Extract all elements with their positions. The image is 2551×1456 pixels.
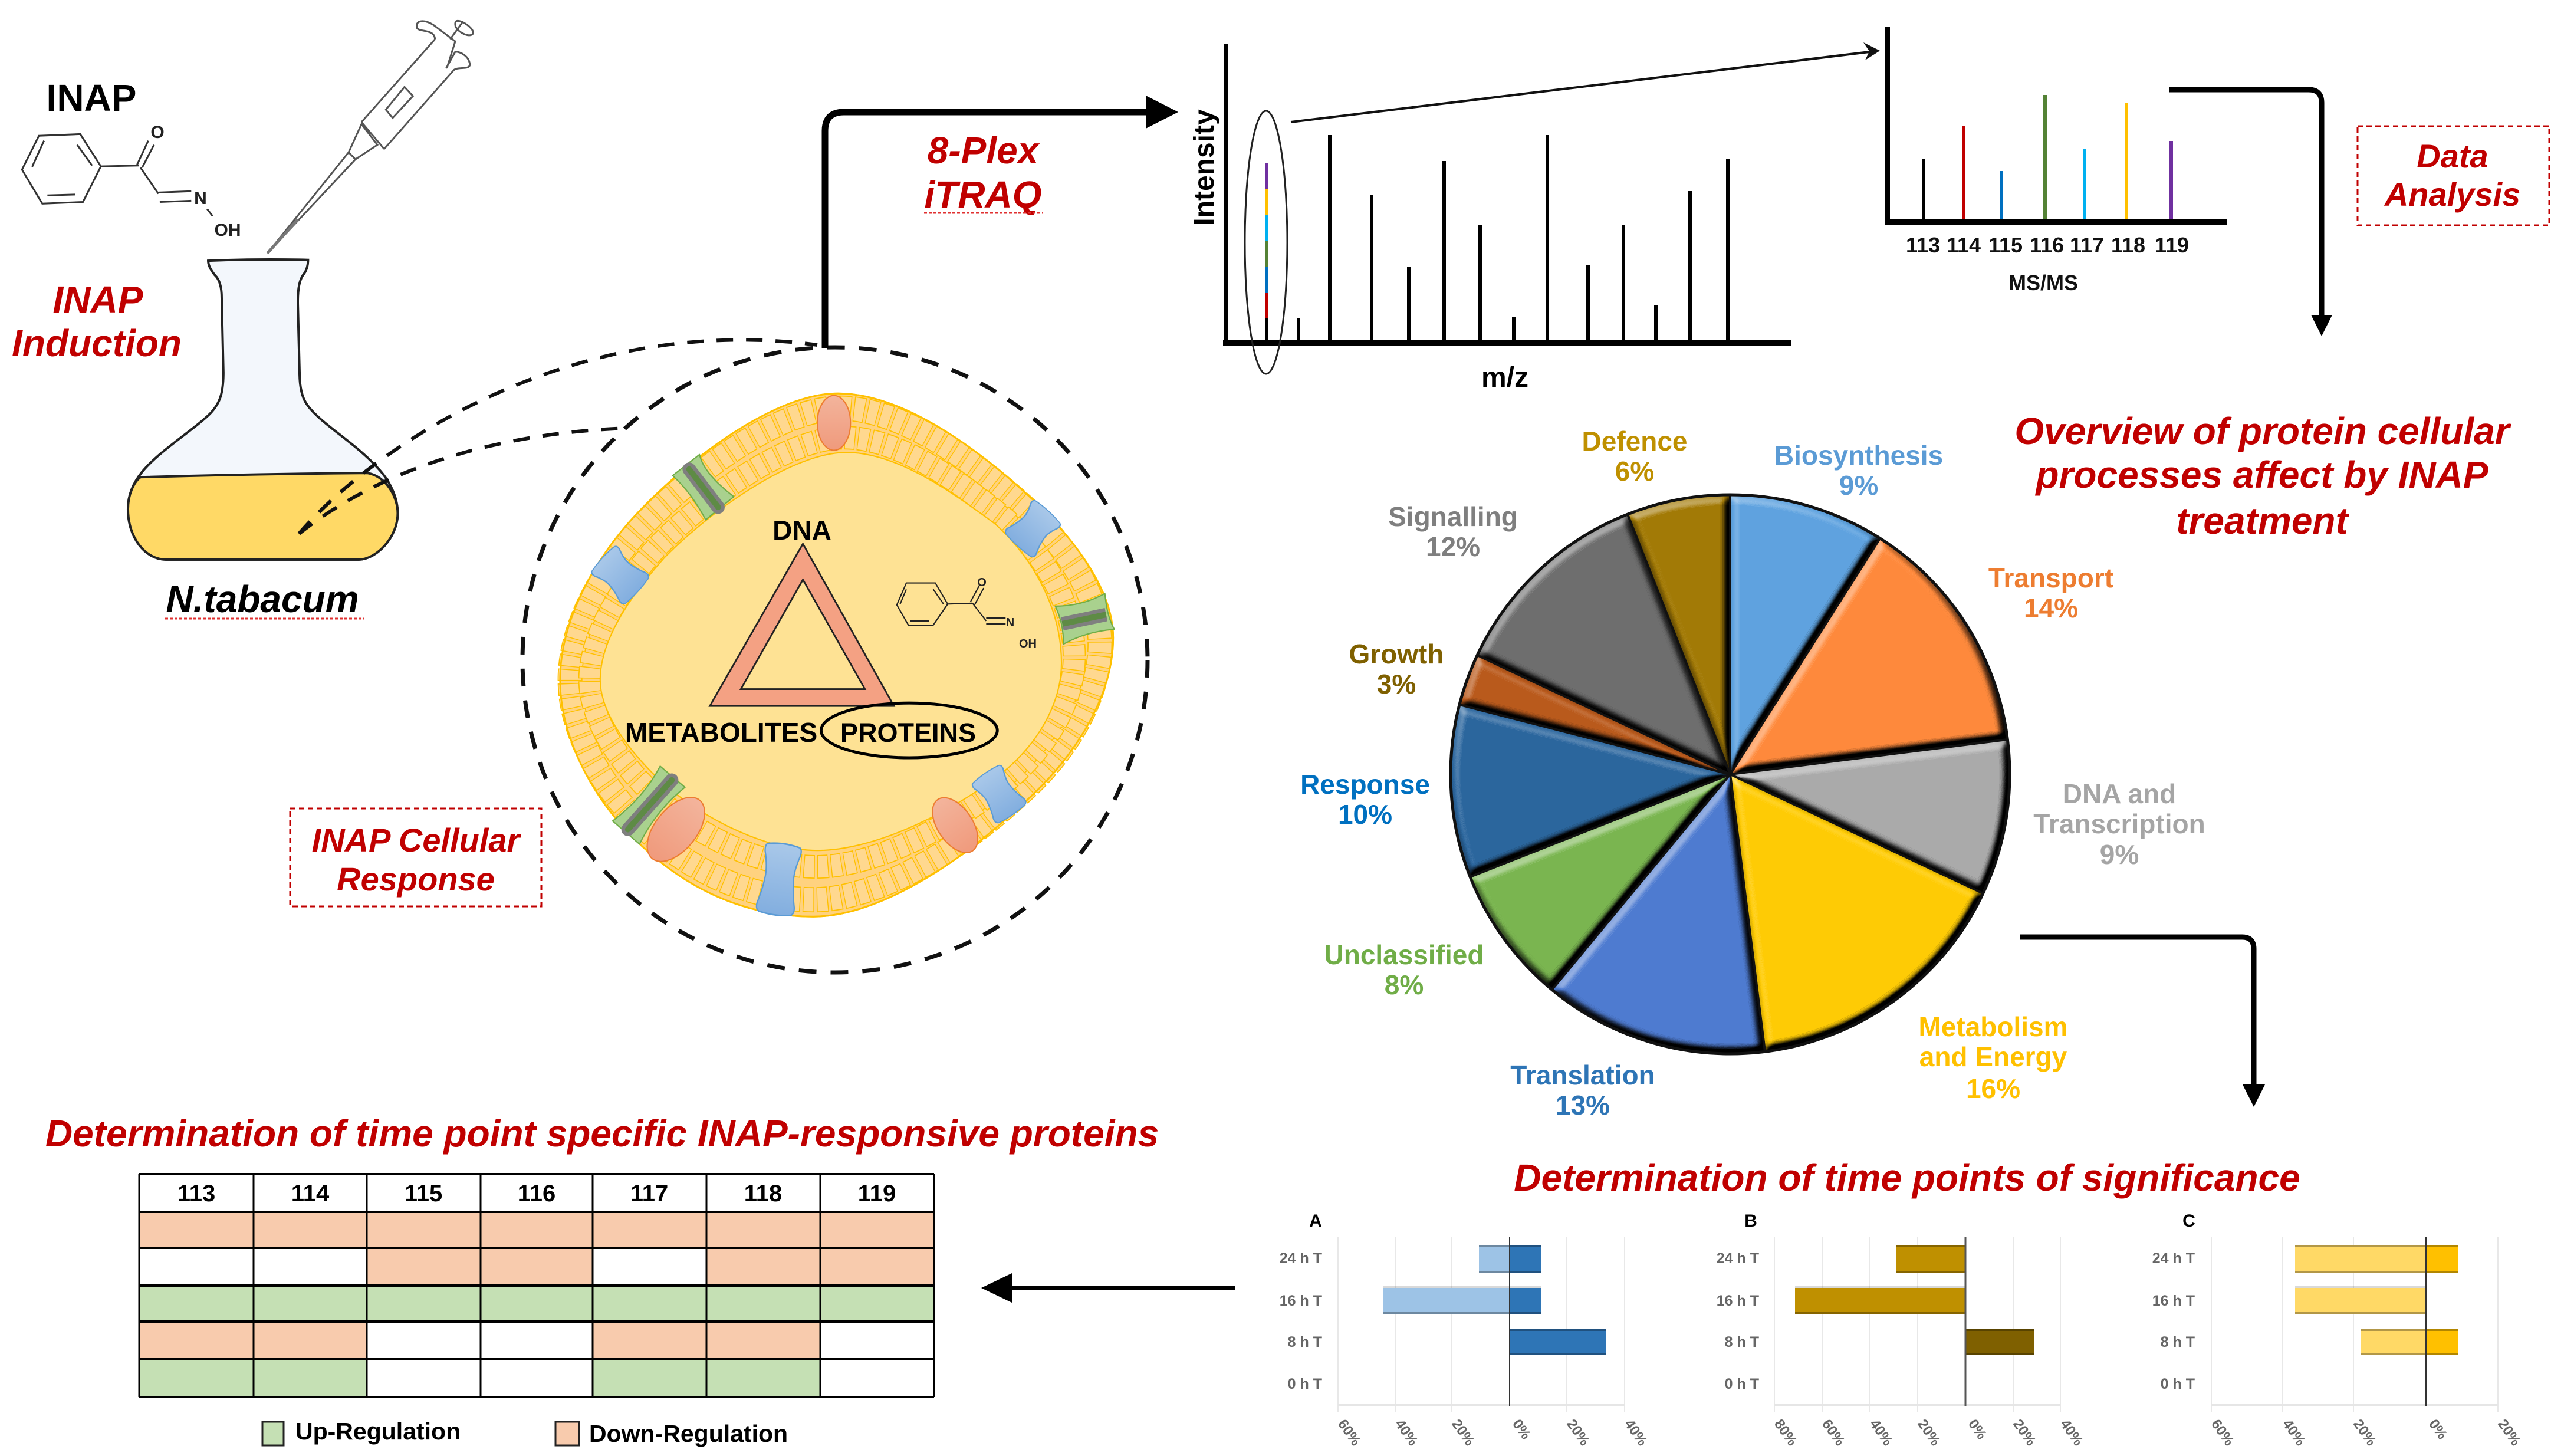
chart B: 0 h T xyxy=(1725,1376,1759,1392)
chart: MS/MS reporter ions: 115 xyxy=(1988,233,2023,257)
chart C: 24 h T xyxy=(2152,1250,2195,1267)
chart C: 0 h T xyxy=(2161,1376,2195,1392)
chart A: 16 h T xyxy=(1280,1293,1322,1309)
cytoplasm xyxy=(600,452,1061,850)
pie label: Defence xyxy=(1582,426,1687,487)
chart B: 20% xyxy=(1914,1416,1944,1449)
pie label: Defence: Defence xyxy=(1582,426,1687,456)
legend: Up-Regulation: Up-Regulation xyxy=(295,1418,461,1445)
membrane proteins: blue channels xyxy=(589,498,1063,918)
label: INAP Induction: Induction xyxy=(12,322,182,364)
pie label: Metabolism and Energy: 16% xyxy=(1966,1073,2020,1104)
bar 16 h T xyxy=(1795,1286,1965,1314)
pie label: Metabolism and Energy xyxy=(1918,1011,2068,1104)
pie label: DNA and Transcription: 9% xyxy=(2100,839,2139,870)
chart B xyxy=(1717,1211,2086,1449)
ellipse around proteins xyxy=(821,703,997,758)
icon: INAP chemical structure: N xyxy=(194,189,207,208)
arrow: spectrum zoom xyxy=(1291,42,1880,122)
slice: translation xyxy=(1552,774,1765,1054)
label: METABOLITES: METABOLITES xyxy=(625,717,817,748)
chart A: A xyxy=(1309,1211,1322,1231)
heading: overview of protein cellular processes: processes affect by INAP xyxy=(2034,453,2488,496)
pie label: Metabolism and Energy: and Energy xyxy=(1919,1041,2067,1072)
table header: 116 xyxy=(518,1181,555,1207)
chart A: 0% xyxy=(1509,1416,1534,1442)
legend: Down-Regulation: Down-Regulation xyxy=(589,1420,788,1447)
bar 24 h T xyxy=(1896,1245,1965,1273)
label: 8-Plex iTRAQ: iTRAQ xyxy=(924,173,1042,216)
chart A: 24 h T xyxy=(1280,1250,1322,1267)
chart A: 40% xyxy=(1621,1416,1651,1449)
callout: INAP Cellular Response xyxy=(290,808,541,906)
pie label: Metabolism and Energy: Metabolism xyxy=(1918,1011,2068,1042)
selection ellipse xyxy=(1245,111,1287,374)
slice: metabolism and energy xyxy=(1730,774,1983,1051)
pie label: Biosynthesis xyxy=(1774,440,1943,501)
axis label: m/z: m/z xyxy=(1481,362,1528,393)
spectrum peaks xyxy=(1298,135,1728,342)
slice: biosynthesis xyxy=(1730,495,1880,774)
pie label: DNA and Transcription xyxy=(2033,778,2205,870)
label: 8-Plex iTRAQ xyxy=(924,129,1043,216)
arrow: pie to time points xyxy=(2020,937,2265,1107)
pie label: Response: 10% xyxy=(1338,799,1392,830)
chart C: 0% xyxy=(2425,1416,2450,1442)
chart A: 20% xyxy=(1448,1416,1478,1449)
chart B: 16 h T xyxy=(1717,1293,1759,1309)
chart B: B xyxy=(1744,1211,1757,1231)
arrow: cell to iTRAQ xyxy=(825,96,1178,348)
chart C: 20% xyxy=(2494,1416,2524,1449)
icon: INAP chemical structure: O xyxy=(150,123,165,142)
table header: 114 xyxy=(291,1181,330,1207)
chart: MS/MS reporter ions: 119 xyxy=(2155,233,2189,257)
pie label: Signalling: 12% xyxy=(1426,531,1480,562)
arrow: MS/MS to pie overview xyxy=(2169,90,2332,336)
bar 24 h T xyxy=(2295,1245,2458,1273)
bar 16 h T xyxy=(2295,1286,2426,1314)
heading: overview of protein cellular processes xyxy=(2014,410,2511,542)
label: INAP Induction xyxy=(12,278,182,364)
heading: determination of time point specific INAP-responsive proteins: Determination of time point specific INAP-responsive proteins xyxy=(45,1112,1159,1155)
chart: pie of cellular processes xyxy=(1451,495,2010,1054)
pie label: Signalling: Signalling xyxy=(1388,501,1518,532)
icon: INAP chemical structure: OH xyxy=(215,221,241,240)
chart C: C xyxy=(2182,1211,2195,1231)
callout: INAP Cellular Response: INAP Cellular xyxy=(312,821,522,859)
pie label: Growth: Growth xyxy=(1349,639,1444,669)
chart A: 20% xyxy=(1563,1416,1593,1449)
chart C: 16 h T xyxy=(2152,1293,2195,1309)
pie label: Unclassified: 8% xyxy=(1385,969,1424,1000)
chart A xyxy=(1280,1211,1651,1449)
membrane proteins: orange xyxy=(636,396,987,872)
label: DNA: DNA xyxy=(772,515,831,545)
heading: determination of time points of significance: Determination of time points of significance xyxy=(1514,1156,2300,1199)
chart B: 60% xyxy=(1819,1416,1848,1449)
slice: defence xyxy=(1628,495,1730,774)
structure atom labels: OH xyxy=(1019,637,1037,650)
table header: 117 xyxy=(630,1181,668,1207)
chart A: 0 h T xyxy=(1288,1376,1322,1392)
table header: 118 xyxy=(744,1181,782,1207)
zoom guide: dashed lines from flask to cell xyxy=(299,340,817,534)
icon: INAP structure inside cell xyxy=(897,583,1005,625)
callout: INAP Cellular Response: Response xyxy=(337,860,495,898)
pie label: DNA and Transcription: Transcription xyxy=(2033,808,2205,839)
slice: unclassified xyxy=(1470,774,1730,990)
structure atom labels xyxy=(977,576,1037,650)
pie label: Unclassified: Unclassified xyxy=(1324,939,1484,970)
slice: DNA and transcription xyxy=(1730,739,2010,893)
chart A: 60% xyxy=(1334,1416,1364,1449)
icon: flask with culture xyxy=(128,259,397,560)
chart B: 40% xyxy=(2057,1416,2086,1449)
pie label: Defence: 6% xyxy=(1615,456,1654,487)
slice: response xyxy=(1451,705,1730,877)
chart B: 0% xyxy=(1965,1416,1990,1442)
bar 24 h T xyxy=(1479,1245,1541,1273)
chart B: 24 h T xyxy=(1717,1250,1759,1267)
pie label: Biosynthesis: Biosynthesis xyxy=(1774,440,1943,471)
chart A: 8 h T xyxy=(1288,1334,1322,1350)
chart: MS/MS reporter ions: 117 xyxy=(2070,233,2104,257)
heading: overview of protein cellular processes: treatment xyxy=(2176,499,2349,542)
bar 16 h T xyxy=(1383,1286,1541,1314)
pie label: Translation: Translation xyxy=(1510,1060,1655,1090)
slice: transport xyxy=(1730,538,2007,774)
chart: MS/MS reporter ions: MS/MS xyxy=(2008,271,2078,295)
label: 8-Plex iTRAQ: 8-Plex xyxy=(928,129,1040,172)
chart: MS/MS reporter ions: 116 xyxy=(2030,233,2064,257)
bar 8 h T xyxy=(2361,1329,2458,1355)
label: N.tabacum: N.tabacum xyxy=(166,578,359,620)
table row colours xyxy=(139,1212,934,1359)
bar 8 h T xyxy=(1510,1329,1606,1355)
table header: 119 xyxy=(858,1181,896,1207)
chart C: 8 h T xyxy=(2161,1334,2195,1350)
bar 8 h T xyxy=(1965,1329,2034,1355)
pie label: Transport: Transport xyxy=(1988,563,2113,593)
membrane proteins: green channels xyxy=(613,455,1115,844)
chart B: 80% xyxy=(1771,1416,1800,1449)
table header: 113 xyxy=(177,1181,215,1207)
reporter peak stack xyxy=(1265,163,1268,342)
table header: 115 xyxy=(405,1181,442,1207)
pie label: Response xyxy=(1300,769,1430,830)
pie label: Response: Response xyxy=(1300,769,1430,800)
chart B: 20% xyxy=(2010,1416,2039,1449)
chart B: 40% xyxy=(1866,1416,1896,1449)
label: INAP Induction: INAP xyxy=(53,278,143,321)
chart C: 20% xyxy=(2350,1416,2379,1449)
pie label: Growth xyxy=(1349,639,1444,699)
chart: MS/MS reporter ions: 118 xyxy=(2111,233,2145,257)
structure atom labels: N xyxy=(1006,616,1014,629)
chart B: 8 h T xyxy=(1725,1334,1759,1350)
chart C xyxy=(2152,1211,2524,1449)
chart: MS/MS reporter ions: 113 xyxy=(1906,233,1940,257)
icon: INAP chemical structure xyxy=(22,123,241,240)
axis label: Intensity: Intensity xyxy=(1189,109,1220,226)
pie label: Transport: 14% xyxy=(2024,593,2078,623)
triangle: DNA metabolites proteins xyxy=(710,544,894,706)
label: PROTEINS: PROTEINS xyxy=(840,718,976,748)
chart: MS/MS reporter ions xyxy=(1885,27,2227,295)
pie label: Translation: 13% xyxy=(1556,1090,1610,1120)
callout: Data Analysis xyxy=(2358,126,2549,225)
table: time point regulation xyxy=(139,1174,934,1397)
structure atom labels: O xyxy=(977,576,987,589)
pie label: Unclassified xyxy=(1324,939,1484,1000)
axis xyxy=(1223,44,1791,346)
callout: Data Analysis: Data xyxy=(2417,137,2488,175)
chart: MS spectrum xyxy=(1223,44,1791,374)
pie label: Biosynthesis: 9% xyxy=(1839,470,1878,501)
dashed circle around cell xyxy=(522,347,1148,972)
slice: signalling xyxy=(1477,514,1730,774)
pie label: DNA and Transcription: DNA and xyxy=(2063,778,2176,809)
label: INAP: INAP xyxy=(47,77,136,119)
cell membrane xyxy=(560,393,1113,916)
heading: overview of protein cellular processes: Overview of protein cellular xyxy=(2014,410,2511,452)
pie label: Signalling xyxy=(1388,501,1518,562)
pie label: Transport xyxy=(1988,563,2113,623)
chart C: 40% xyxy=(2279,1416,2309,1449)
slice: growth xyxy=(1459,655,1730,774)
table header xyxy=(177,1181,896,1207)
pie label: Growth: 3% xyxy=(1377,669,1416,699)
panel: plant cell xyxy=(560,393,1115,918)
pie label: Translation xyxy=(1510,1060,1655,1120)
icon: pipette xyxy=(267,21,473,254)
callout: Data Analysis: Analysis xyxy=(2384,176,2520,213)
chart C: 60% xyxy=(2208,1416,2237,1449)
chart: MS/MS reporter ions: 114 xyxy=(1947,233,1981,257)
chart A: 40% xyxy=(1392,1416,1421,1449)
arrow: charts to table xyxy=(981,1273,1235,1303)
